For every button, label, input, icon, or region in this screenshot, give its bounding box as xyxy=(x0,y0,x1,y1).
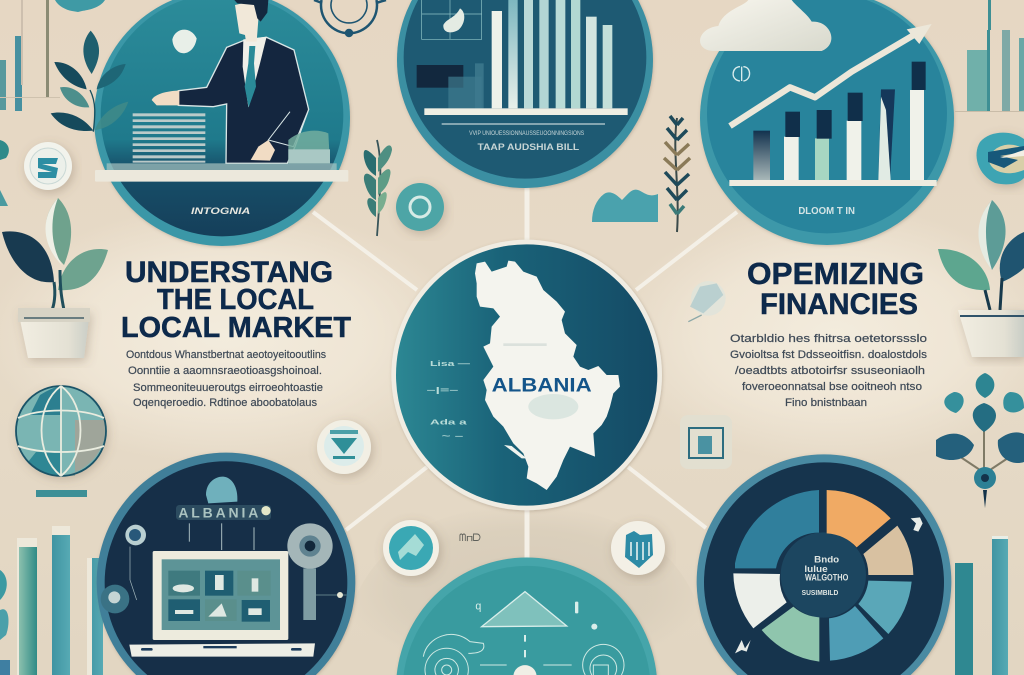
laptop xyxy=(129,551,315,657)
chart: top-right sketch bars xyxy=(955,0,1024,112)
heading: understanding the local market: LOCAL MARKET xyxy=(121,312,351,344)
faint legend: –|=– xyxy=(427,386,458,395)
businessman figure xyxy=(152,0,309,163)
shelf xyxy=(424,108,628,115)
shelf xyxy=(729,180,937,186)
donut center text xyxy=(802,555,848,597)
heading: understanding the local market: UNDERSTANG xyxy=(125,256,333,289)
icon: white blob xyxy=(443,8,464,32)
caption lines: TAAP AUDSHIA BILL xyxy=(477,142,579,152)
text block: left paragraph: Oontdous Whanstbertnat aeotoyeitooutlins xyxy=(126,349,326,361)
icon: S badge xyxy=(24,142,72,190)
icon: badge with emblem xyxy=(317,420,371,474)
outline sketches xyxy=(423,634,624,675)
chart: bottom-right bars xyxy=(955,536,1008,675)
coast details xyxy=(504,445,527,458)
icon: globe xyxy=(16,386,106,476)
chart: bottom-left bars xyxy=(17,526,103,675)
icon: left bottom-center badge xyxy=(383,520,439,576)
map label: ALBANIA xyxy=(492,375,592,396)
faint legend xyxy=(427,359,471,440)
icon: small bar under globe xyxy=(36,490,87,497)
panel: bottom-left laptop xyxy=(97,453,355,675)
icon: right swirl badge xyxy=(976,133,1024,184)
icon: left edge leaves xyxy=(0,140,9,206)
icon: left potted plant xyxy=(2,198,108,358)
donut center text: WALGOTHO xyxy=(805,573,848,583)
heading: optimizing finances: FINANCIES xyxy=(760,288,918,321)
dark boxes xyxy=(417,63,484,108)
panel: center Albania map xyxy=(391,240,662,510)
icon: teal mountains xyxy=(592,190,658,222)
donut center text: Bndo xyxy=(814,555,839,565)
small marks: q xyxy=(475,600,481,612)
map smudge xyxy=(528,394,578,419)
map of Albania xyxy=(475,261,620,490)
magnifier xyxy=(287,523,347,620)
text block: right paragraph: Otarbldio hes fhitrsa oetetorssslo xyxy=(730,333,927,345)
cloud xyxy=(700,0,831,51)
icon: shield badge xyxy=(611,521,665,575)
icon: left edge decoration xyxy=(0,570,10,675)
text block: right paragraph: foveroeonnatsal bse ooitneoh ntso xyxy=(742,381,922,393)
icon: small glyph text: ᗰ⊓ᗞ xyxy=(459,533,481,544)
icon: framed emblem xyxy=(680,415,732,469)
hanging lines xyxy=(130,523,254,600)
icon: small outlined lens right xyxy=(688,281,726,322)
donut center text: SUSIMBILD xyxy=(802,588,838,597)
trend arrow xyxy=(730,24,932,126)
icon: teal badge xyxy=(396,183,444,231)
icon: plant pot on shelf xyxy=(288,131,330,163)
text block: left paragraph xyxy=(126,349,326,409)
house roof xyxy=(482,592,567,627)
heading: optimizing finances: OPEMIZING xyxy=(747,256,924,291)
wireframe window xyxy=(422,0,482,39)
text block: right paragraph: Fino bnistnbaan xyxy=(785,397,867,409)
panel: top-left businessman xyxy=(94,0,350,246)
icon: flower plant xyxy=(936,373,1024,508)
white bars xyxy=(492,0,612,108)
caption lines: VVIP UNIOUESSIONNAUSSEUOONNINGSIONS xyxy=(469,130,585,137)
icon: small leaf plant xyxy=(364,140,392,236)
text block: left paragraph: Sommeoniteuueroutgs eirroeohtoastie xyxy=(133,382,323,394)
icon: left leaf sprig xyxy=(51,31,128,132)
panel: bottom-center icons xyxy=(397,558,657,675)
small marks xyxy=(475,600,597,675)
caption: DLOOM T IN xyxy=(798,206,855,217)
text block: left paragraph: Oqenqeroedio. Rdtinoe aboobatolaus xyxy=(133,397,317,409)
small icons xyxy=(735,517,923,653)
text block: right paragraph xyxy=(730,333,928,409)
icon: top-left bars sketch xyxy=(0,0,60,111)
teal dome xyxy=(206,477,237,503)
albania pill label: ALBANIA xyxy=(178,504,258,520)
faint legend: ~ – xyxy=(442,431,463,440)
icon: fern xyxy=(664,116,690,232)
document stack xyxy=(133,113,205,163)
heading: understanding the local market: THE LOCAL xyxy=(157,284,314,316)
faint legend: Ada a xyxy=(430,418,468,427)
heading: optimizing finances xyxy=(747,256,924,321)
text block: left paragraph: Oonntiie a aaomnsraeotioasgshoinoal. xyxy=(128,365,322,377)
icon: top-left teal emblem xyxy=(55,0,105,12)
connector lines xyxy=(313,186,737,560)
text block: right paragraph: /oeadtbts atbotoirfsr ssuseoniaolh xyxy=(735,365,925,377)
faint legend: Lisa — xyxy=(430,359,471,368)
icon: target emblem xyxy=(314,0,386,36)
caption: INTOGNIA xyxy=(191,206,251,216)
donut segments xyxy=(733,490,913,662)
heading: understanding the local market xyxy=(121,256,351,344)
panel: top-center bar chart xyxy=(397,0,653,188)
bars xyxy=(753,62,926,180)
icon: small glyph xyxy=(733,67,750,81)
shelf xyxy=(95,170,348,182)
panel: top-right growth chart xyxy=(700,0,954,245)
donut hole xyxy=(781,532,866,618)
small badges xyxy=(101,525,146,613)
caption lines xyxy=(442,123,605,152)
icon: speech blob xyxy=(172,30,197,53)
donut center text: lulue xyxy=(804,564,828,574)
icon: right potted plant xyxy=(938,200,1024,357)
panel: bottom-right donut chart xyxy=(697,454,951,675)
text block: right paragraph: Gvoioltsa fst Ddsseoitfisn. doalostdols xyxy=(730,349,928,361)
